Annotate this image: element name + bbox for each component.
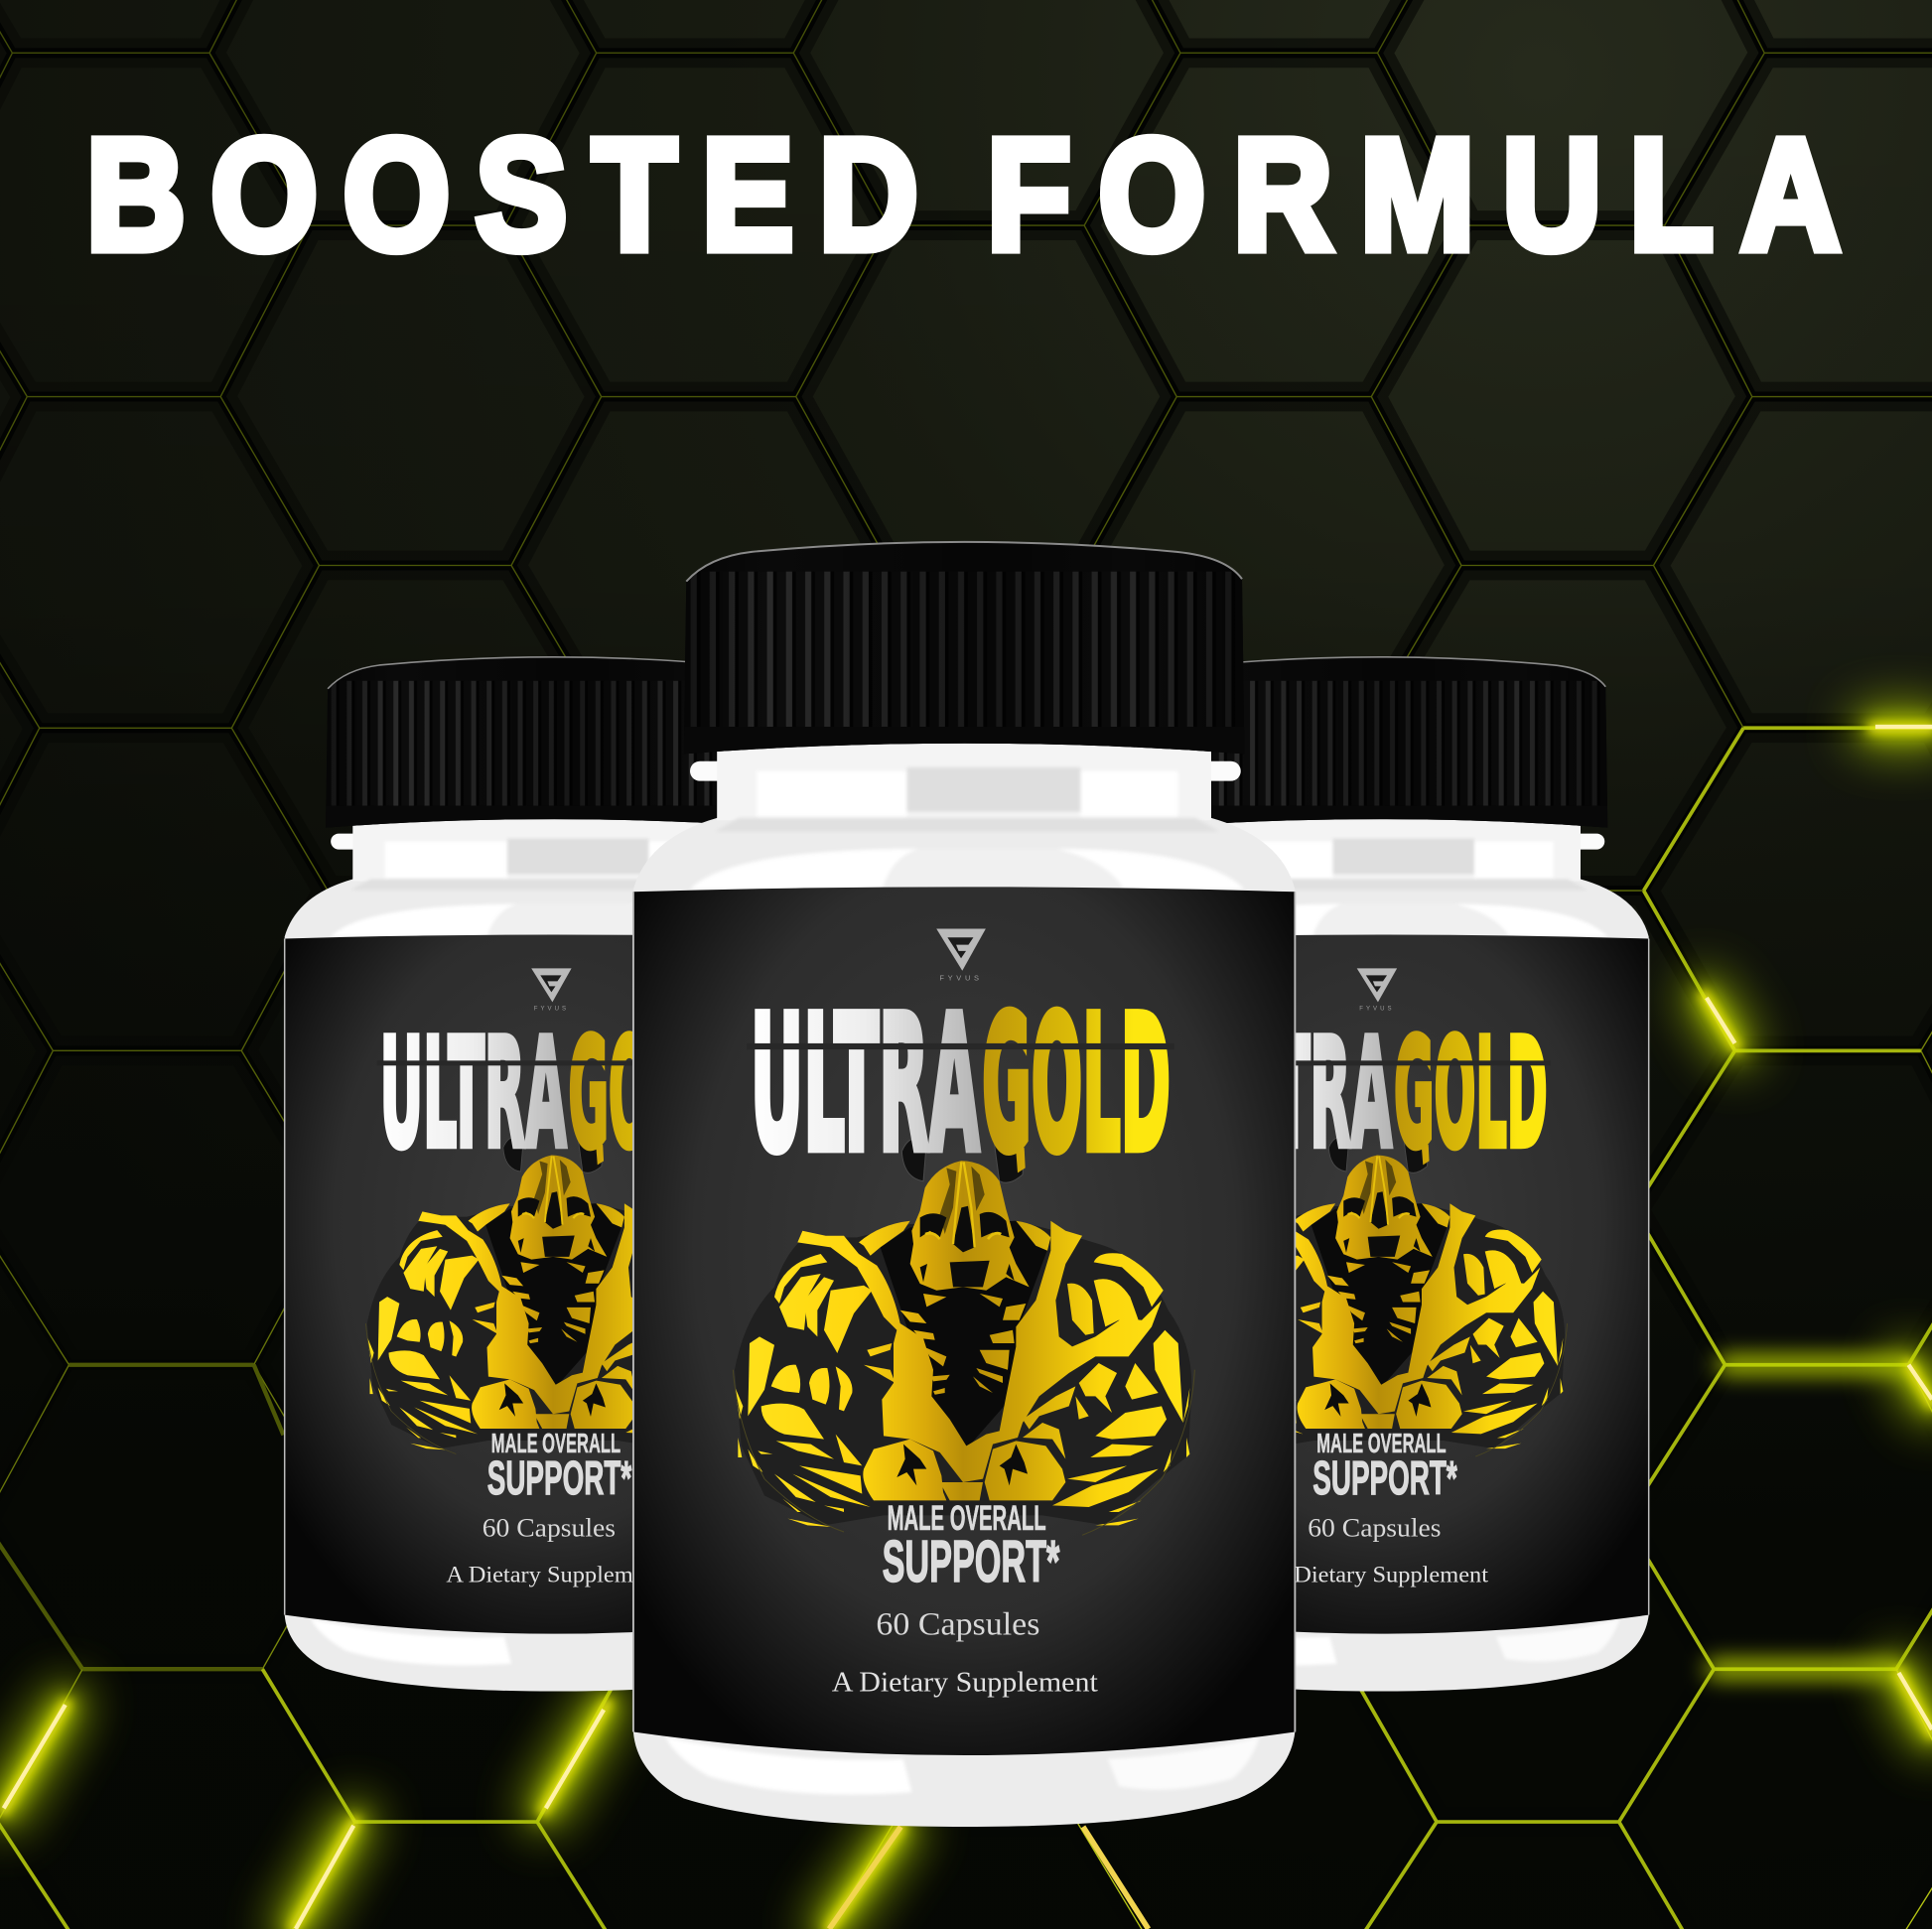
right capsule count: 60 Capsules: [1308, 1514, 1442, 1543]
left support text: MALE OVERALL: [491, 1428, 621, 1458]
left capsule count: 60 Capsules: [483, 1514, 616, 1543]
center product name: [751, 977, 1171, 1193]
center capsule count: 60 Capsules: [876, 1605, 1039, 1641]
bottle: center: GOLD: [982, 977, 1171, 1193]
bottle: right: GOLD: [1394, 1007, 1548, 1181]
right support text: SUPPORT*: [1312, 1451, 1457, 1505]
left brand text: FYVUS: [534, 1006, 569, 1012]
left slit across name: [377, 1060, 725, 1065]
center support text: [883, 1500, 1060, 1594]
left product name: [380, 1007, 722, 1181]
right support text: [1312, 1428, 1457, 1505]
center slit across name: [747, 1043, 1174, 1049]
title: FORMULA: [987, 106, 1841, 283]
right support text: MALE OVERALL: [1316, 1428, 1447, 1458]
neon glow segments: [4, 727, 1932, 1929]
center product name: ULTRA: [751, 977, 980, 1193]
right dietary note: A Dietary Supplement: [1272, 1562, 1489, 1587]
center dietary note: A Dietary Supplement: [832, 1668, 1098, 1699]
title: BOOSTED: [86, 106, 918, 283]
center brand text: FYVUS: [939, 974, 983, 983]
bottle: center: [633, 542, 1295, 1827]
bottle: right: [1110, 657, 1649, 1692]
bottle: left: [285, 657, 823, 1692]
title: [86, 106, 1841, 283]
right brand text: FYVUS: [1359, 1006, 1395, 1012]
right product name: [1205, 1007, 1548, 1181]
right slit across name: [1202, 1060, 1551, 1065]
left product name: ULTRA: [380, 1007, 567, 1181]
bottle: left: GOLD: [569, 1007, 722, 1181]
left dietary note: A Dietary Supplement: [446, 1562, 663, 1587]
center support text: SUPPORT*: [883, 1528, 1060, 1594]
left support text: SUPPORT*: [487, 1451, 631, 1505]
center support text: MALE OVERALL: [888, 1500, 1046, 1538]
left support text: [487, 1428, 631, 1505]
right product name: ULTRA: [1205, 1007, 1392, 1181]
